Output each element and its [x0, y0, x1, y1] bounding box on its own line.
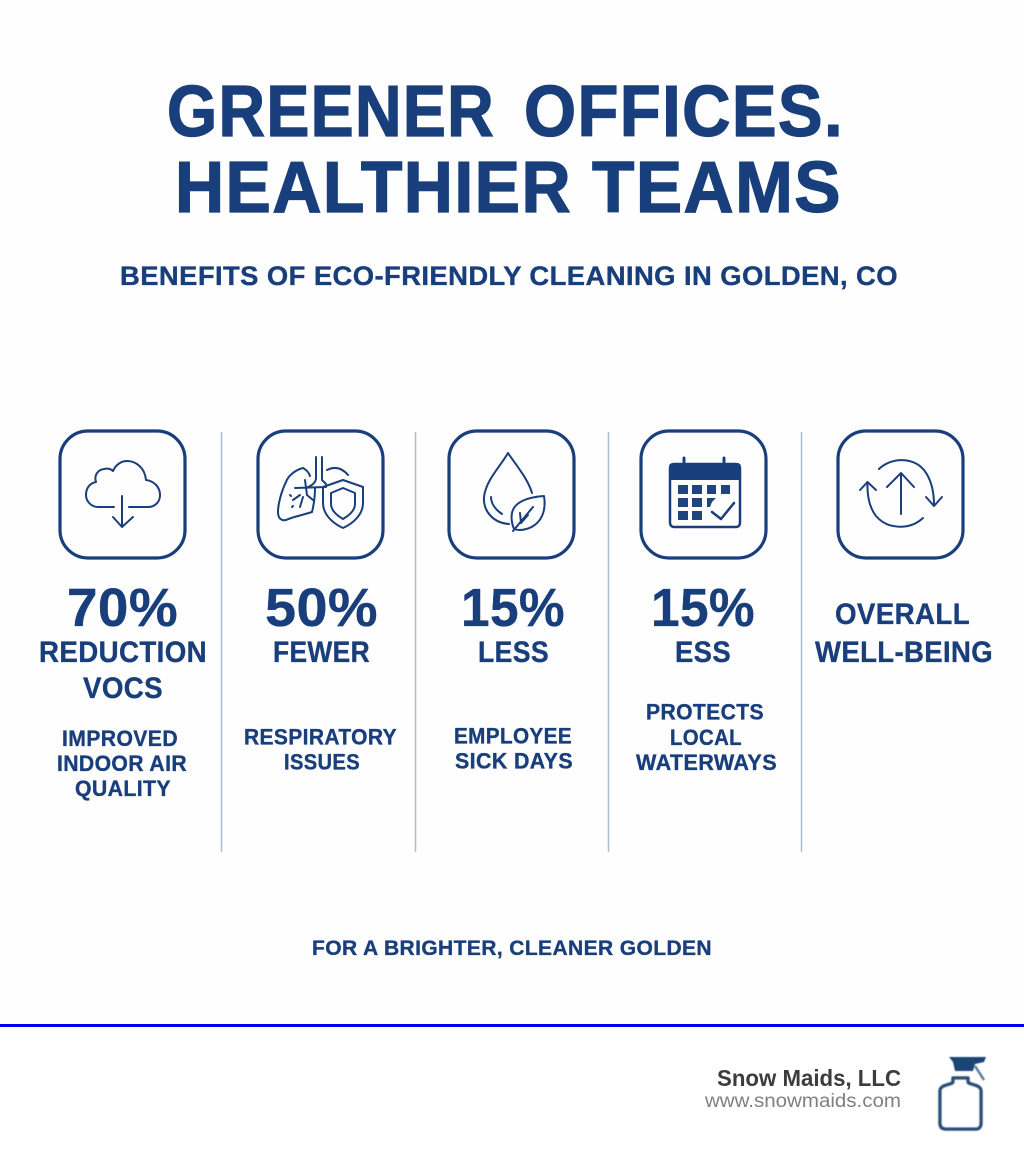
title: [167, 72, 844, 228]
panel: VOC reduction: [39, 431, 207, 801]
label: reduction VOCs: REDUCTION: [39, 636, 207, 669]
description: EMPLOYEE: [454, 724, 572, 748]
icon: lungs and shield: [258, 431, 383, 558]
icon: calendar with check: [641, 431, 766, 558]
description: [244, 724, 397, 774]
title: TEAMS: [592, 148, 842, 228]
panel: local waterways: [636, 431, 777, 775]
stat: 70%: 70%: [67, 578, 178, 638]
label: fewer: FEWER: [273, 636, 370, 669]
label: ess: ESS: [675, 636, 731, 669]
title: OFFICES.: [524, 72, 844, 152]
website: www.snowmaids.com: [704, 1091, 901, 1112]
description: QUALITY: [75, 776, 171, 801]
description: PROTECTS: [646, 700, 764, 724]
description: RESPIRATORY: [244, 724, 397, 750]
stat: 15%: 15%: [651, 578, 755, 638]
icon: cycle with up arrow: [838, 431, 963, 558]
label: less: LESS: [478, 636, 549, 669]
description: [57, 726, 187, 801]
description: [636, 700, 777, 775]
description: LOCAL: [670, 725, 742, 750]
icon: water drop and leaf: [449, 431, 574, 558]
description: IMPROVED: [62, 726, 178, 751]
company name: Snow Maids, LLC: [717, 1065, 901, 1091]
panel: respiratory issues: [244, 431, 397, 774]
stat: 15%: 15%: [461, 578, 565, 638]
description: INDOOR AIR: [57, 751, 187, 776]
label: overall well-being: [815, 598, 993, 669]
panel: overall well-being: [815, 431, 993, 669]
label: overall well-being: WELL-BEING: [815, 636, 993, 669]
icon: spray bottle: [940, 1057, 986, 1129]
title: HEALTHIER: [175, 148, 572, 228]
footer rule: [0, 1024, 1024, 1027]
label: reduction VOCs: [39, 636, 207, 705]
subtitle: BENEFITS OF ECO-FRIENDLY CLEANING IN GOLDEN, CO: [120, 261, 898, 291]
description: ISSUES: [284, 750, 360, 774]
tagline: FOR A BRIGHTER, CLEANER GOLDEN: [312, 936, 712, 960]
description: WATERWAYS: [636, 750, 777, 775]
label: overall well-being: OVERALL: [835, 598, 970, 631]
title: GREENER: [167, 72, 495, 152]
description: [454, 724, 573, 774]
description: SICK DAYS: [455, 748, 573, 774]
stat: 50%: 50%: [265, 578, 378, 638]
label: reduction VOCs: VOCS: [83, 672, 163, 705]
icon: cloud download: [60, 431, 185, 558]
footer background: [0, 1027, 1024, 1154]
panel: sick days: [449, 431, 574, 774]
